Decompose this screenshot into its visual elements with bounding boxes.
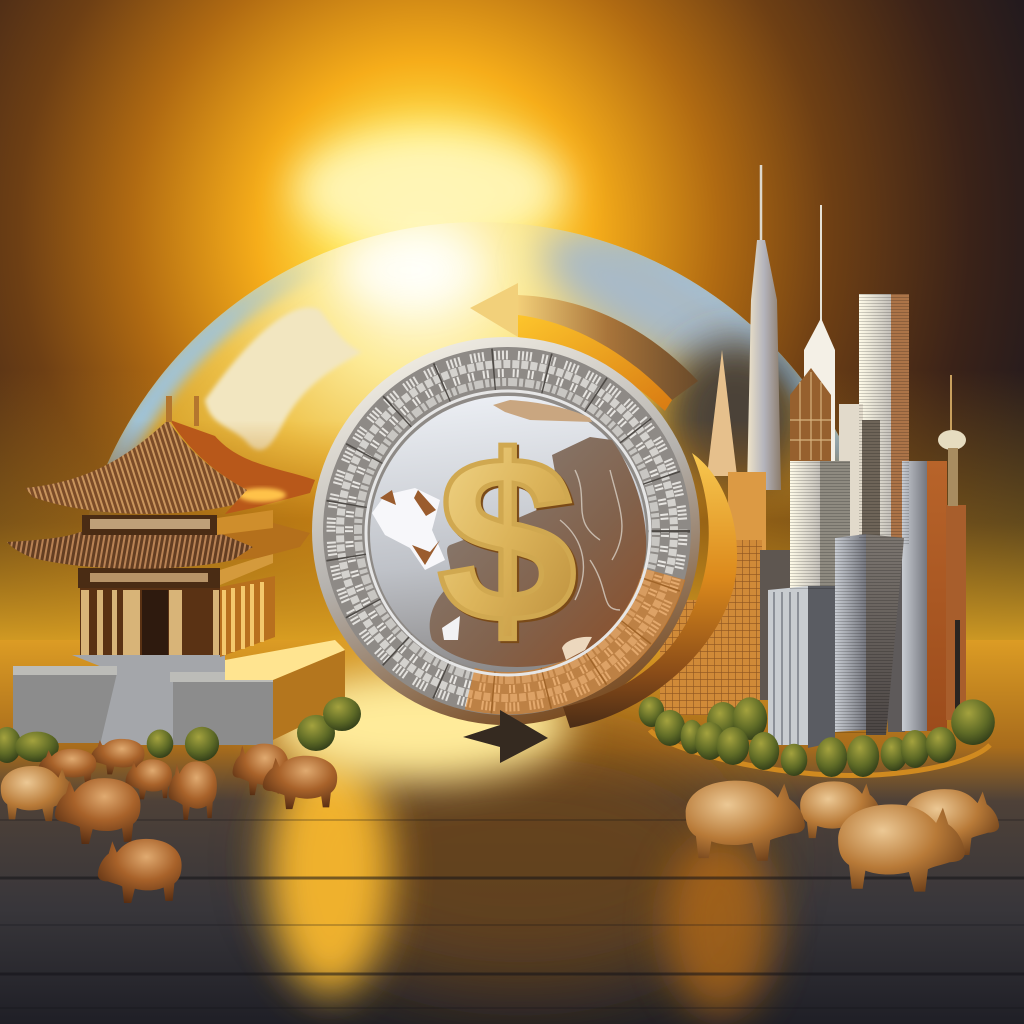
dome tower bbox=[790, 368, 831, 462]
temple lower roof bbox=[7, 532, 253, 569]
orange towers bbox=[728, 472, 766, 602]
dollar sign: $ bbox=[437, 407, 577, 671]
pigs left bbox=[1, 739, 337, 903]
arrow outer band bbox=[518, 295, 698, 400]
coin map right land bbox=[430, 437, 646, 667]
bushes right bbox=[639, 697, 995, 777]
coin map bottom fragment bbox=[562, 637, 592, 660]
coin map left brown edges bbox=[380, 490, 440, 565]
globe shaded side bbox=[665, 340, 805, 500]
coin warm tint bbox=[470, 574, 664, 693]
globe landmass bbox=[205, 307, 362, 450]
building window lines bbox=[790, 294, 909, 735]
rotating arrow: top bbox=[470, 283, 698, 411]
temple right colonnade bbox=[220, 576, 275, 657]
globe clouds right bbox=[524, 226, 785, 381]
tv tower bbox=[938, 375, 966, 720]
temple columns bbox=[81, 590, 219, 655]
skyline platform bbox=[650, 730, 990, 775]
temple wooden side of base bbox=[273, 650, 345, 740]
rotating arrow: bottom head bbox=[463, 710, 548, 763]
temple wall tops bbox=[13, 666, 273, 682]
lit block bbox=[790, 461, 820, 591]
temple front hall bbox=[80, 585, 220, 655]
mid block bbox=[839, 404, 863, 544]
orange spire bbox=[707, 350, 737, 476]
coin face bbox=[370, 396, 646, 672]
globe bbox=[89, 222, 839, 515]
tall spire tower bbox=[747, 240, 781, 490]
temple upper frieze bbox=[82, 515, 217, 535]
globe blue limb bbox=[89, 238, 839, 515]
skyline bbox=[660, 165, 966, 748]
pigs right bbox=[686, 781, 999, 892]
warm centre shading bbox=[290, 730, 750, 990]
white crown tower bbox=[804, 318, 835, 470]
front left tower bbox=[768, 586, 808, 745]
sun glow bbox=[295, 128, 565, 252]
globe cloud cap bbox=[340, 235, 480, 305]
temple roof finials bbox=[166, 396, 199, 426]
coin rim bbox=[312, 337, 700, 725]
coin map small shard bbox=[442, 616, 460, 640]
light reflection left bbox=[268, 745, 392, 995]
temple roof highlight bbox=[238, 488, 286, 502]
light reflection right bbox=[665, 835, 775, 1015]
white tower bbox=[859, 294, 891, 544]
coin map engraved lines bbox=[560, 470, 622, 610]
temple central stairs bbox=[72, 655, 225, 745]
temple upper roof front bbox=[25, 420, 247, 514]
temple stone walls bbox=[13, 673, 273, 745]
arrow head bbox=[470, 283, 518, 337]
coin inner line bbox=[366, 391, 650, 675]
bushes left bbox=[0, 697, 361, 763]
tall spire antenna bbox=[760, 165, 762, 240]
temple lower frieze bbox=[78, 568, 220, 588]
coin bbox=[312, 337, 700, 725]
coin engraved ring bbox=[331, 355, 683, 707]
front silver tower bbox=[835, 534, 866, 732]
temple door bbox=[142, 590, 168, 655]
coin map left white land bbox=[372, 488, 445, 570]
second spire antenna bbox=[820, 205, 822, 320]
bright path under coin bbox=[270, 670, 570, 780]
back dark column bbox=[880, 540, 905, 732]
temple upper roof right bbox=[170, 420, 315, 514]
temple bright terrace bbox=[225, 640, 345, 680]
wooden table bbox=[0, 640, 1024, 1024]
coin map top fragment bbox=[493, 400, 592, 422]
arrow inner band bbox=[518, 315, 672, 411]
rotating arrow: right crescent bbox=[563, 453, 737, 728]
right slab bbox=[902, 461, 927, 731]
horizon glow bbox=[0, 370, 1024, 710]
dark back block bbox=[760, 550, 790, 700]
temple bbox=[7, 396, 345, 745]
